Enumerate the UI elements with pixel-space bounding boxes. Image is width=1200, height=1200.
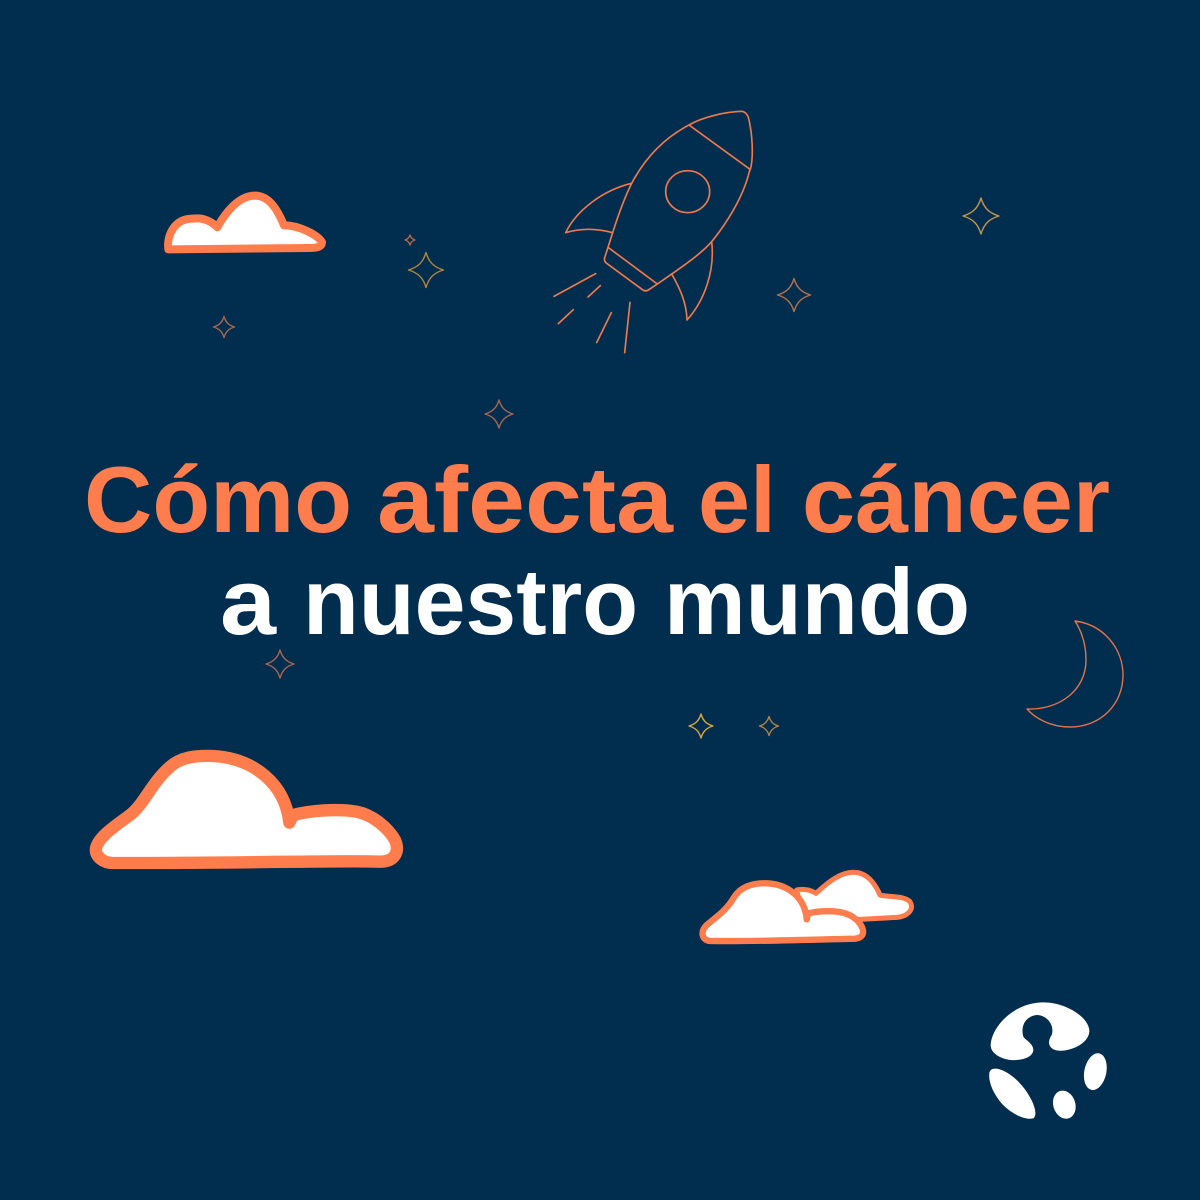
title: nuestro — [303, 549, 638, 654]
title: mundo — [664, 549, 970, 654]
title: Cómo — [84, 447, 352, 552]
cloud: double lower right — [703, 872, 911, 941]
title: cáncer — [802, 447, 1110, 552]
title: a — [220, 549, 277, 654]
title: el — [698, 447, 776, 552]
title — [84, 447, 1110, 654]
cloud: top left — [168, 196, 322, 249]
logo — [989, 1002, 1110, 1122]
icon: rocket — [554, 111, 752, 353]
stars — [214, 198, 999, 738]
title: afecta — [377, 447, 674, 552]
cloud: large lower left — [96, 756, 397, 863]
icon: crescent moon — [1027, 621, 1123, 727]
